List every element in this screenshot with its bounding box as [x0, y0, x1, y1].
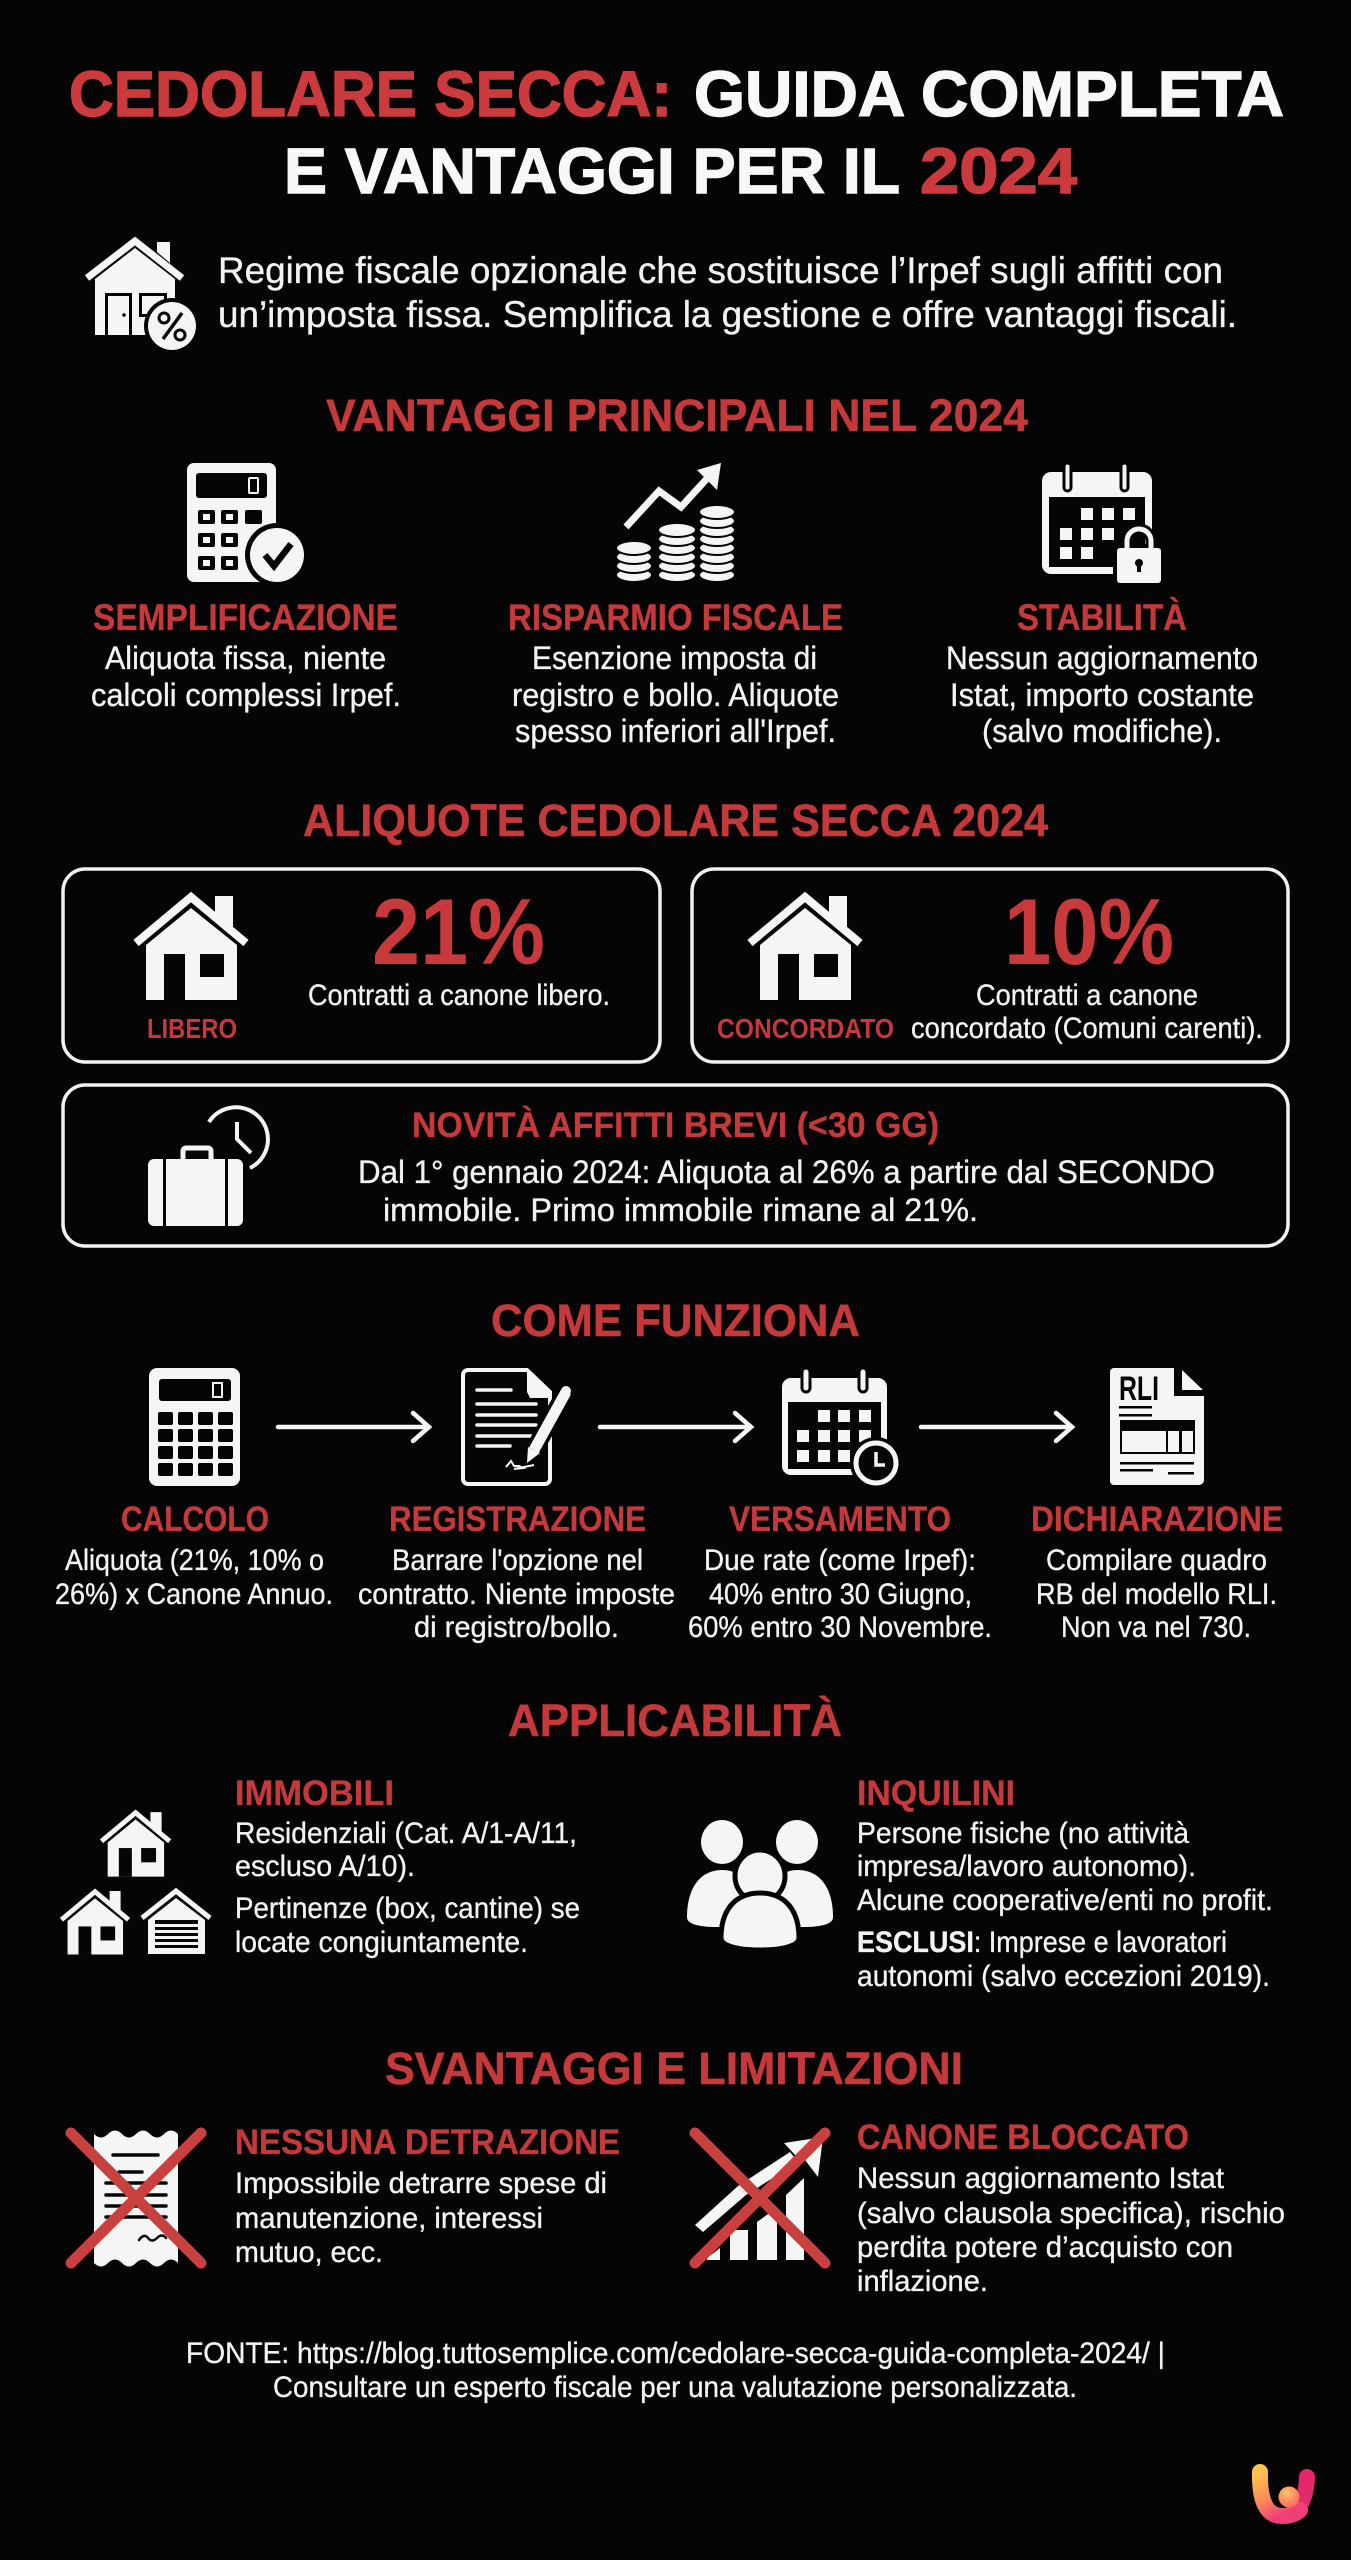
- step: dichiarazione: [1031, 1368, 1283, 1644]
- intro text: [218, 250, 1237, 335]
- icon: calculator: [149, 1368, 240, 1486]
- text: dichiarazione: [1036, 1544, 1277, 1644]
- text: canone bloccato: Nessun aggiornamento Istat: [857, 2162, 1225, 2195]
- text: nessuna detrazione: mutuo, ecc.: [235, 2236, 383, 2269]
- icon: calendar with clock: [782, 1368, 902, 1489]
- text: inquilini: autonomi (salvo eccezioni 2019).: [857, 1960, 1270, 1993]
- icon: suitcase with clock: [148, 1107, 268, 1226]
- panel: stabilita: [946, 463, 1258, 749]
- text: inquilini: Persone fisiche (no attività: [857, 1817, 1189, 1850]
- panel: canone concordato: [692, 869, 1288, 1062]
- heading: risparmio fiscale: RISPARMIO FISCALE: [508, 597, 843, 638]
- intro text: Regime fiscale opzionale che sostituisce l’Irpef sugli affitti con: [218, 250, 1223, 291]
- text: inquilini: Alcune cooperative/enti no profit.: [857, 1884, 1273, 1917]
- icon: house libero: [136, 896, 246, 1000]
- text: semplificazione: calcoli complessi Irpef.: [91, 677, 401, 713]
- text: immobili: escluso A/10).: [235, 1850, 415, 1883]
- step: registrazione: [358, 1370, 675, 1644]
- heading: svantaggi: SVANTAGGI E LIMITAZIONI: [385, 2043, 963, 2094]
- heading: semplificazione: SEMPLIFICAZIONE: [93, 597, 398, 638]
- source note: FONTE: https://blog.tuttosemplice.com/cedolare-secca-guida-completa-2024/ |: [186, 2337, 1165, 2370]
- text: registrazione: Barrare l'opzione nel: [392, 1544, 643, 1577]
- step: versamento: [688, 1368, 992, 1644]
- text: dichiarazione: Compilare quadro: [1046, 1544, 1267, 1577]
- title: E VANTAGGI PER IL: [284, 135, 900, 207]
- icon: calendar with padlock: [1042, 463, 1165, 587]
- icon: document with pen: [463, 1370, 571, 1484]
- text: versamento: Due rate (come Irpef):: [704, 1544, 976, 1577]
- text: versamento: 40% entro 30 Giugno,: [709, 1578, 972, 1611]
- text: risparmio fiscale: [512, 640, 839, 749]
- text: nessuna detrazione: manutenzione, interessi: [235, 2202, 543, 2235]
- text: canone bloccato: (salvo clausola specifica), rischio: [857, 2197, 1285, 2230]
- text: stabilita: Istat, importo costante: [950, 677, 1254, 713]
- icon: calculator with check: [187, 463, 309, 587]
- title: 2024: [920, 135, 1077, 207]
- panel: immobili: [61, 1774, 580, 1959]
- value: 21%: 21%: [372, 879, 545, 984]
- text: stabilita: Nessun aggiornamento: [946, 640, 1258, 676]
- text: canone libero: Contratti a canone libero.: [308, 979, 610, 1012]
- text: immobili: Residenziali (Cat. A/1-A/11,: [235, 1817, 577, 1850]
- source note: Consultare un esperto fiscale per una valutazione personalizzata.: [273, 2371, 1077, 2404]
- text: nessuna detrazione: Impossibile detrarre spese di: [235, 2167, 607, 2200]
- panel: novita affitti brevi: [63, 1085, 1288, 1246]
- value: 10%: 10%: [1004, 879, 1174, 984]
- heading: applicabilita: APPLICABILITÀ: [508, 1695, 842, 1746]
- panel: nessuna detrazione: [71, 2123, 620, 2269]
- heading: nessuna detrazione: NESSUNA DETRAZIONE: [235, 2123, 620, 2162]
- text: canone concordato: Contratti a canone: [976, 979, 1198, 1012]
- heading: aliquote: ALIQUOTE CEDOLARE SECCA 2024: [303, 795, 1048, 846]
- text: immobili: [235, 1817, 580, 1959]
- heading: calcolo: CALCOLO: [121, 1500, 269, 1539]
- text: calcolo: 26%) x Canone Annuo.: [55, 1578, 333, 1611]
- text: versamento: [688, 1544, 992, 1644]
- title: [69, 58, 1284, 207]
- logo: [1260, 2472, 1307, 2516]
- label: libero: LIBERO: [147, 1013, 237, 1044]
- icon: group of people: [687, 1820, 833, 1950]
- text: immobili: locate congiuntamente.: [235, 1926, 528, 1959]
- heading: dichiarazione: DICHIARAZIONE: [1031, 1500, 1283, 1539]
- text: nessuna detrazione: [235, 2167, 607, 2269]
- arrow: versamento to dichiarazione: [921, 1413, 1072, 1441]
- text: semplificazione: [91, 640, 401, 713]
- intro text: un’imposta fissa. Semplifica la gestione e offre vantaggi fiscali.: [218, 294, 1237, 335]
- heading: registrazione: REGISTRAZIONE: [389, 1500, 646, 1539]
- arrow: calcolo to registrazione: [278, 1413, 429, 1441]
- text: stabilita: [946, 640, 1258, 749]
- label: concordato: CONCORDATO: [717, 1013, 894, 1044]
- text: stabilita: (salvo modifiche).: [982, 713, 1222, 749]
- icon: RLI form: RLI: [1119, 1370, 1159, 1408]
- text: inquilini: impresa/lavoro autonomo).: [857, 1850, 1196, 1883]
- heading: stabilita: STABILITÀ: [1017, 597, 1187, 638]
- text: registrazione: di registro/bollo.: [414, 1611, 619, 1644]
- text: inquilini: [857, 1817, 1273, 1993]
- heading: inquilini: INQUILINI: [857, 1774, 1015, 1813]
- panel: canone bloccato: [695, 2118, 1285, 2298]
- text: registrazione: [358, 1544, 675, 1644]
- icon: house with percent: [87, 241, 200, 354]
- text: novita affitti brevi: Dal 1° gennaio 2024: Aliquota al 26% a partire dal SECONDO: [358, 1154, 1215, 1190]
- step: calcolo: [55, 1368, 333, 1611]
- text: inquilini: ESCLUSI: Imprese e lavoratori: [857, 1926, 1227, 1959]
- text: canone bloccato: perdita potere d’acquisto con: [857, 2231, 1233, 2264]
- text: canone concordato: [911, 979, 1263, 1045]
- heading: immobili: IMMOBILI: [235, 1774, 394, 1813]
- source note: [186, 2337, 1165, 2404]
- text: dichiarazione: RB del modello RLI.: [1036, 1578, 1277, 1611]
- panel: intro: [87, 241, 1237, 354]
- panel: canone libero: [63, 869, 660, 1062]
- text: risparmio fiscale: spesso inferiori all'Irpef.: [515, 713, 836, 749]
- icon: crossed rising chart: [695, 2133, 825, 2263]
- text: dichiarazione: Non va nel 730.: [1061, 1611, 1251, 1644]
- icon: houses and garage: [61, 1812, 210, 1954]
- text: canone bloccato: [857, 2162, 1285, 2298]
- text: registrazione: contratto. Niente imposte: [358, 1578, 675, 1611]
- icon: RLI form: [1110, 1368, 1204, 1485]
- text: versamento: 60% entro 30 Novembre.: [688, 1611, 992, 1644]
- text: calcolo: [55, 1544, 333, 1611]
- text: novita affitti brevi: immobile. Primo immobile rimane al 21%.: [383, 1192, 978, 1228]
- arrow: registrazione to versamento: [600, 1413, 751, 1441]
- panel: semplificazione: [91, 463, 401, 713]
- text: canone concordato: concordato (Comuni carenti).: [911, 1012, 1263, 1045]
- text: canone bloccato: inflazione.: [857, 2265, 988, 2298]
- heading: vantaggi principali: VANTAGGI PRINCIPALI NEL 2024: [326, 390, 1028, 441]
- text: risparmio fiscale: registro e bollo. Aliquote: [512, 677, 839, 713]
- text: risparmio fiscale: Esenzione imposta di: [532, 640, 817, 676]
- panel: risparmio fiscale: [508, 463, 843, 749]
- heading: novita affitti brevi: NOVITÀ AFFITTI BREVI (<30 GG): [412, 1105, 939, 1145]
- panel: inquilini: [687, 1774, 1273, 1993]
- icon: coins and rising arrow: [616, 463, 735, 582]
- title: GUIDA COMPLETA: [694, 58, 1284, 130]
- text: novita affitti brevi: [358, 1154, 1215, 1228]
- title: CEDOLARE SECCA:: [69, 58, 672, 130]
- heading: come funziona: COME FUNZIONA: [491, 1295, 860, 1346]
- heading: canone bloccato: CANONE BLOCCATO: [857, 2118, 1189, 2157]
- icon: house concordato: [750, 896, 860, 1000]
- text: calcolo: Aliquota (21%, 10% o: [65, 1544, 324, 1577]
- text: semplificazione: Aliquota fissa, niente: [105, 640, 386, 676]
- icon: crossed receipt: [71, 2130, 201, 2266]
- heading: versamento: VERSAMENTO: [729, 1500, 951, 1539]
- text: immobili: Pertinenze (box, cantine) se: [235, 1892, 580, 1925]
